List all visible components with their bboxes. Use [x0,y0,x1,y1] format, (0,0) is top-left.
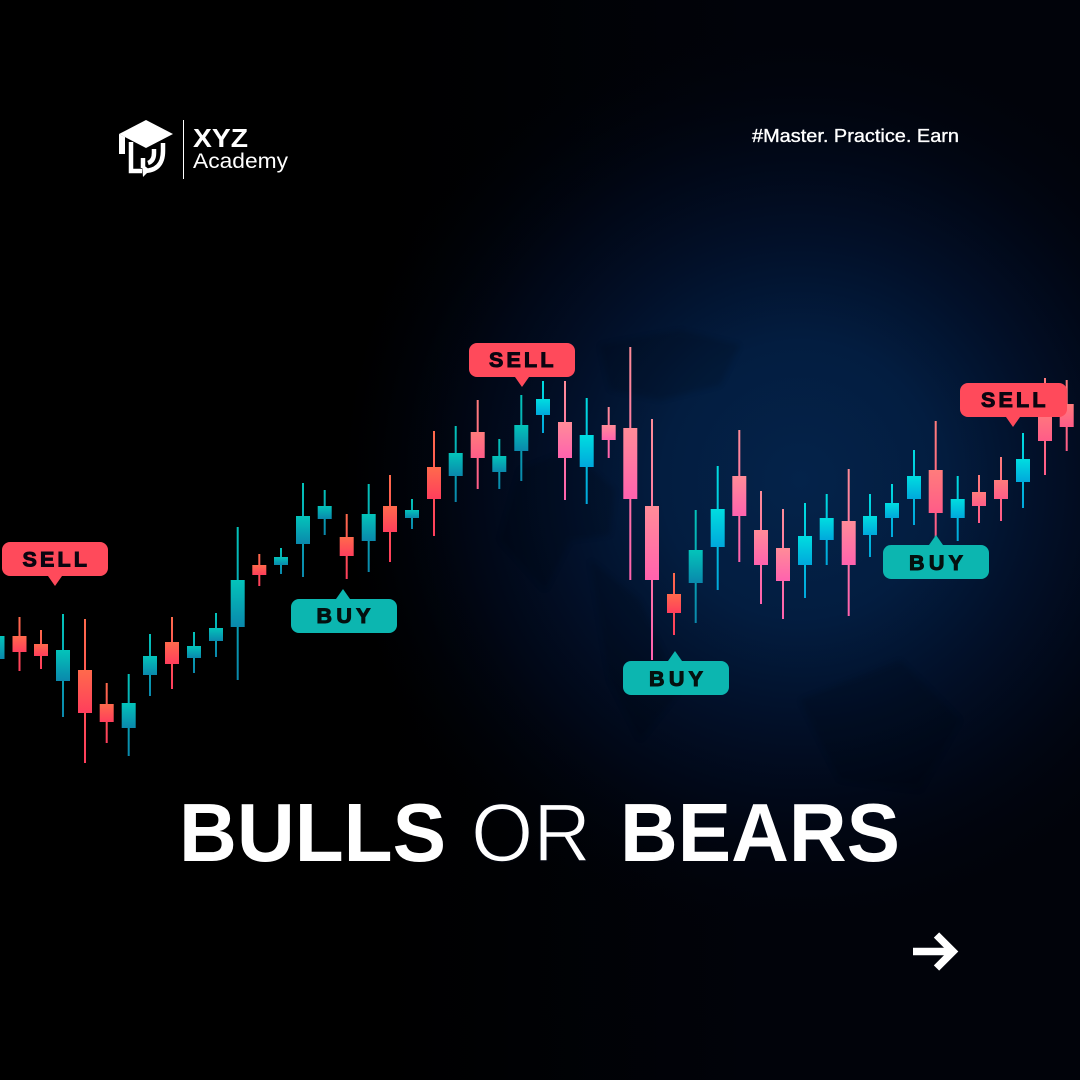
candle 38 [798,503,812,598]
candle 32 [667,573,681,635]
world map silhouette [500,330,960,790]
title [179,786,900,879]
candle 41 [863,494,877,557]
title: OR [471,786,591,879]
candle 28 [580,398,594,504]
candle 12 [231,527,245,680]
candle 22 [449,426,463,502]
icon: graduation cap [119,120,173,177]
candle 42 [885,484,899,537]
candlestick chart [0,347,1074,763]
buy label left [291,589,397,633]
candle 4 [56,614,70,717]
candle 30 [623,347,637,580]
candle 8 [143,634,157,696]
candle 46 [972,475,986,523]
buy label right: BUY [909,551,963,575]
candle 47 [994,457,1008,521]
tagline: #Master. Practice. Earn [752,126,959,146]
candle 29 [602,407,616,458]
candle 20 [405,499,419,529]
buy label center: BUY [649,667,703,691]
candle 11 [209,613,223,657]
icon: arrow [913,935,953,968]
candle 45 [951,476,965,541]
sell label right [960,383,1067,427]
candle 9 [165,617,179,689]
candle 43 [907,450,921,525]
buy label right [883,535,989,579]
logo divider [183,120,184,179]
candle 15 [296,483,310,577]
sell label top: SELL [489,348,554,372]
candle 13 [252,554,266,586]
title: BULLS [179,786,446,879]
candle 7 [122,674,136,756]
candle 26 [536,381,550,433]
sell label left [2,542,108,586]
buy label center [623,651,729,695]
candle 37 [776,509,790,619]
buy label left: BUY [316,604,370,628]
candle 6 [100,683,114,743]
candle 18 [362,484,376,572]
sell label right: SELL [981,388,1046,412]
candle 2 [12,617,26,671]
candle 34 [711,466,725,590]
candle 10 [187,632,201,673]
candle 21 [427,431,441,536]
candle 5 [78,619,92,763]
candle 35 [732,430,746,562]
logo: XYZ Academy [119,120,289,179]
candle 16 [318,490,332,535]
title: BEARS [620,786,900,879]
candle 25 [514,395,528,481]
sell label top [469,343,575,387]
candle 14 [274,548,288,574]
candle 33 [689,510,703,623]
candle 19 [383,475,397,562]
candle 27 [558,381,572,500]
candle 48 [1016,433,1030,508]
logo wordmark Academy: Academy [193,150,289,173]
candle 36 [754,491,768,604]
candle 40 [842,469,856,616]
candle 31 [645,419,659,660]
candle 23 [471,400,485,489]
sell label left: SELL [22,548,87,572]
candle 24 [492,439,506,489]
candle 39 [820,494,834,565]
candle 44 [929,421,943,537]
candle 50 [1060,380,1074,451]
logo wordmark XYZ: XYZ [193,123,248,153]
candle 49 [1038,378,1052,475]
candle 1 [0,636,4,659]
candle 17 [340,514,354,579]
candle 3 [34,630,48,669]
